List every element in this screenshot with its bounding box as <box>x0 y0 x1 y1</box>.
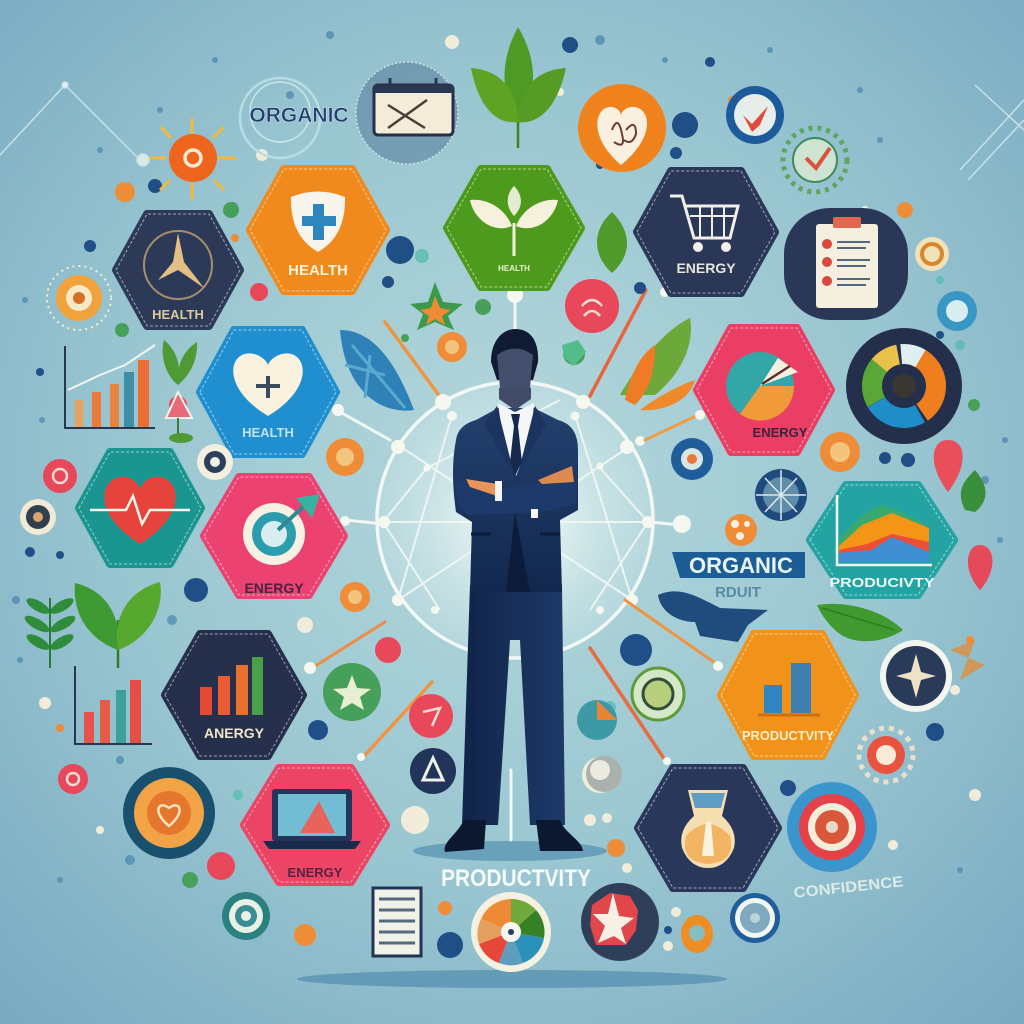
organic wordmark top <box>240 78 349 158</box>
tie <box>510 414 522 476</box>
icon: sun badge left <box>47 266 111 330</box>
icon: sprout <box>470 186 558 256</box>
icon: bar chart <box>200 657 263 715</box>
icon: leaf right <box>817 604 903 641</box>
badge: star bottom <box>581 883 659 961</box>
label: HEALTH <box>242 425 294 440</box>
icon: sun burst <box>150 118 236 200</box>
icon: donut <box>859 341 949 431</box>
icon: bars <box>758 663 820 715</box>
label: ORGANIC <box>249 104 349 127</box>
icon: ring left small <box>20 444 233 535</box>
icon: leaf cluster left <box>75 582 161 668</box>
hexagon: health blue <box>200 330 336 454</box>
icon: laptop <box>263 789 361 849</box>
icon: compass star <box>144 231 212 299</box>
small badges lower middle <box>410 668 684 794</box>
label: ENERGY <box>244 580 304 596</box>
icon: blue round badge <box>671 438 713 480</box>
hexagon: energy laptop <box>244 768 386 882</box>
crossed arms <box>455 478 578 515</box>
label: confidence: CONFIDENCE <box>793 873 904 902</box>
label: HEALTH <box>288 262 348 279</box>
pockets <box>471 532 560 536</box>
icon: globe compass <box>755 469 807 521</box>
label: PRODUCIVTY <box>830 575 935 590</box>
icon: flask <box>681 790 735 868</box>
hexagon: productivity teal chart <box>810 485 954 595</box>
target medallion confidence <box>787 782 877 872</box>
icon: sprig <box>163 340 197 385</box>
jacket opening <box>506 512 530 592</box>
legs <box>462 585 565 825</box>
figure: businessman <box>445 329 583 852</box>
badge: clipboard <box>784 208 908 320</box>
badge: blue target top right <box>726 86 784 144</box>
lapels <box>484 406 546 474</box>
icon: fruit spray <box>620 318 695 410</box>
hexagon: heart pulse <box>79 452 201 564</box>
icon: checklist <box>816 217 878 308</box>
icon: shield plus <box>291 192 345 252</box>
hexagon: energy cart <box>637 171 775 293</box>
icon: map pin red <box>934 440 992 590</box>
icon: leaves top <box>471 27 566 148</box>
shirt collar <box>498 403 534 476</box>
jacket <box>453 408 578 592</box>
icon: heart plus <box>233 353 303 416</box>
label: ANERGY <box>204 725 265 741</box>
icon: orange medallion lower left <box>123 767 215 859</box>
connector lines <box>312 290 718 840</box>
badge: blue ring bottom <box>730 893 780 943</box>
label: ENERGY <box>676 260 736 276</box>
bar chart lower left <box>75 666 152 744</box>
icon: gem <box>562 340 586 366</box>
label: ENERGY <box>288 865 343 880</box>
organic product wordmark right <box>658 552 805 642</box>
icon: document <box>373 888 421 956</box>
hexagon: health orange <box>250 169 386 291</box>
corner line art <box>0 82 1024 180</box>
icon: heart <box>90 477 190 544</box>
icon: shoes shape <box>658 591 768 642</box>
connector end nodes <box>304 287 723 765</box>
label: HEALTH <box>498 264 530 273</box>
icon: shopping cart <box>670 196 738 250</box>
badge: donut chart <box>846 328 962 444</box>
icon: white star on green circle <box>333 675 371 710</box>
icon: star <box>410 282 463 330</box>
icon: blue feather <box>340 330 414 411</box>
hexagon: energy target <box>204 477 344 596</box>
network circle behind the figure <box>377 382 654 658</box>
label: ENERGY <box>753 425 808 440</box>
icon: small rings bottom left <box>222 892 270 940</box>
icon: pie chart <box>726 352 798 421</box>
title: productivity: PRODUCTVITY <box>441 865 591 892</box>
hexagon: energy bars <box>165 634 303 756</box>
badge: orange ring bottom <box>681 915 713 953</box>
icon: calendar <box>356 62 458 164</box>
shadow ellipses <box>297 841 727 988</box>
icon: area chart <box>837 495 932 565</box>
label: ORGANIC <box>689 553 793 578</box>
icon: leaf small <box>597 212 627 273</box>
icon: target arrow <box>243 494 320 565</box>
hexagon: energy pink pie <box>697 328 831 452</box>
bar chart upper left <box>65 345 155 428</box>
icon: triangle marker <box>166 392 193 443</box>
hexagon: productivity orange <box>721 634 855 756</box>
icon: fruit group right <box>950 470 986 680</box>
hexagon: green plant <box>447 169 581 287</box>
label: RDUIT <box>715 584 761 601</box>
shoes <box>445 820 486 852</box>
hexagon: health dark <box>116 214 240 326</box>
label: HEALTH <box>152 307 204 322</box>
icon: compass badge right <box>880 640 952 712</box>
badge: heart orange <box>578 84 666 172</box>
icon: fern left <box>22 595 78 668</box>
hexagon: hourglass flask <box>638 768 778 888</box>
icon: red wheel <box>859 728 913 782</box>
label: PRODUCTVITY <box>742 728 834 743</box>
icon: green gear <box>783 128 847 192</box>
head <box>491 329 538 380</box>
icon: pie wheel bottom <box>471 892 551 972</box>
icon: ring medallions right <box>915 237 977 331</box>
